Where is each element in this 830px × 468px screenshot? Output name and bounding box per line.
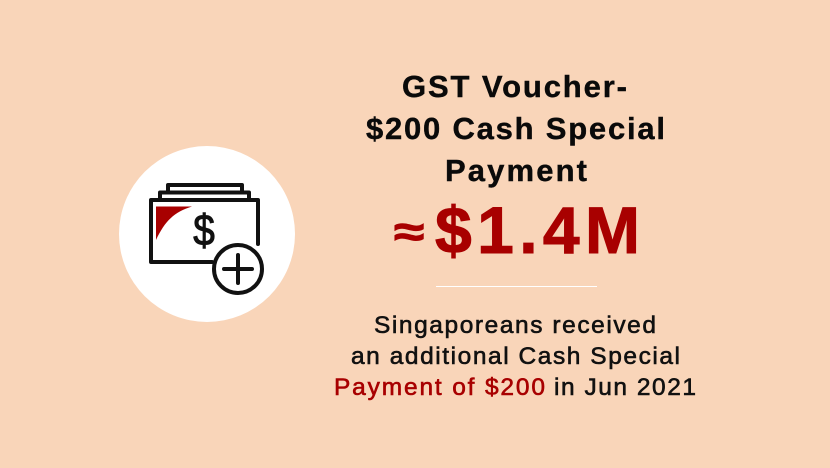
icon: cash stack with plus in white circle bbox=[119, 146, 295, 322]
divider line bbox=[436, 286, 597, 287]
description text: an additional Cash Special bbox=[351, 343, 680, 370]
title: Payment bbox=[445, 153, 587, 188]
icon: plus badge bbox=[214, 245, 262, 293]
icon: dollar sign: $ bbox=[193, 205, 215, 255]
icon: front banknote bbox=[151, 200, 258, 262]
title bbox=[366, 69, 665, 188]
description text: in Jun 2021 bbox=[554, 374, 696, 401]
key figure: approximately $1.4M: $1.4M bbox=[435, 193, 640, 267]
description text bbox=[334, 312, 696, 401]
key figure: approximately $1.4M: ≈ bbox=[394, 208, 424, 255]
white circle badge bbox=[119, 146, 295, 322]
title: $200 Cash Special bbox=[366, 111, 665, 146]
description text: Payment of $200 bbox=[334, 374, 545, 401]
icon: back banknote edges bbox=[160, 185, 249, 200]
title: GST Voucher- bbox=[402, 69, 627, 104]
description text: Singaporeans received bbox=[374, 312, 656, 339]
icon: red corner bbox=[156, 206, 192, 240]
